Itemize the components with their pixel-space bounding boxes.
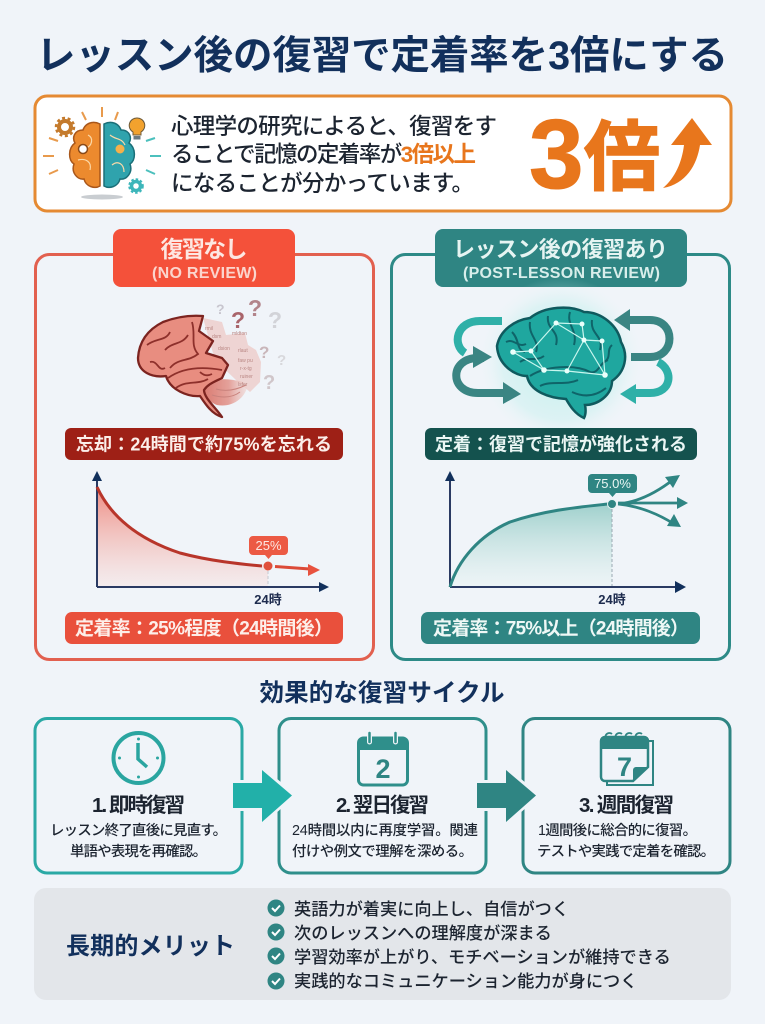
retention result: 75%: 定着率：75%以上（24時間後） [433,618,689,640]
header: no review: (NO REVIEW) [152,265,257,282]
chart: retention curve: 24時 [598,592,626,607]
icon: fading brain with question marks: lsfer [238,382,248,388]
icon: fading brain with question marks [138,295,286,417]
benefit list: 実践的なコミュニケーション能力が身につく [294,971,637,991]
icon: fading brain with question marks: ruiner [240,374,253,380]
arrow: step 2 to 3 [474,766,540,826]
heading: long-term benefits: 長期的メリット [66,933,235,960]
panel: no review [36,229,374,660]
header: no review: 復習なし [160,236,248,262]
panel: long-term benefits [34,888,731,1000]
data label 75.0% [588,474,637,497]
icon: fading brain with question marks: dsm [212,334,221,340]
icon: fading brain with question marks: rmil [205,326,213,332]
panel: intro callout [35,96,731,211]
chart: forgetting curve [92,471,329,607]
icon: fading brain with question marks: rlaut [238,348,248,354]
intro text: になることが分かっています。 [171,171,474,196]
icon: clock [114,733,164,783]
chart: retention curve [445,471,688,607]
retention result: 75% [421,612,700,644]
icon: fading brain with question marks: ? [277,352,286,369]
card: weekly review: 3. 週間復習 [579,794,674,817]
icon: fading brain with question marks: ? [263,372,275,394]
big number 3倍 with arrow [529,99,712,209]
icon: calendar 2 [358,733,408,785]
card: next-day review: 2. 翌日復習 [336,794,429,817]
icon: fading brain with question marks: dsion [218,346,230,352]
icon: brain with gears and light bulb [43,107,161,200]
data label 25%: 25% [255,538,282,553]
icon: fading brain with question marks: ? [259,343,269,362]
intro text: 心理学の研究によると、復習をす [171,114,497,139]
card: weekly review: テストや実践で定着を確認。 [537,843,715,860]
chart: forgetting curve: 24時 [254,592,282,607]
card: next-day review: 24時間以内に再度学習。関連 [292,822,478,839]
benefit list: 学習効率が上がり、モチベーションが維持できる [294,947,671,967]
retention label: 定着：復習で記憶が強化される [435,434,687,454]
card: immediate review: 単語や表現を再確認。 [70,842,207,860]
arrow: step 1 to 2 [230,766,296,826]
benefit list: 英語力が着実に向上し、自信がつく [294,899,569,919]
card: weekly review: 1週間後に総合的に復習。 [538,822,697,839]
icon: fading brain with question marks: faw pu [238,358,253,364]
header: post-lesson review: レッスン後の復習あり [453,237,668,262]
forgetting label: 忘却：24時間で約75%を忘れる [76,434,332,454]
icon: calendar 2: 2 [375,754,391,784]
title: レッスン後の復習で定着率を3倍にする [36,34,728,78]
header: post-lesson review: (POST-LESSON REVIEW) [463,265,660,282]
card: next-day review [279,718,486,873]
panel: post-lesson review [392,229,730,660]
icon: fading brain with question marks: ? [248,295,262,321]
data label 25% [249,536,288,559]
card: immediate review [35,718,242,873]
benefit list [268,899,671,991]
forgetting label [65,428,343,460]
card: weekly review [523,718,730,873]
data label 75.0%: 75.0% [594,476,631,491]
big number 3倍 with arrow: 3 [529,99,584,209]
icon: calendar 7 [601,733,653,785]
icon: calendar 7: 7 [617,752,632,782]
header: post-lesson review [435,229,687,287]
card: immediate review: 1. 即時復習 [92,794,185,817]
intro text: ることで記憶の定着率が3倍以上 [171,142,476,167]
icon: fading brain with question marks: ? [216,301,225,317]
big number 3倍 with arrow: 倍 [584,116,660,201]
retention label [425,428,697,460]
card: immediate review: レッスン終了直後に見直す。 [50,822,227,839]
header: no review [113,229,295,287]
icon: fading brain with question marks: r-x-tg [240,366,252,372]
icon: fading brain with question marks: ? [268,307,282,333]
icon: fading brain with question marks: ? [231,307,245,333]
icon: fading brain with question marks: mldton [232,331,247,337]
retention result: 25%: 定着率：25%程度（24時間後） [75,618,333,640]
intro text [171,114,497,196]
card: next-day review: 付けや例文で理解を深める。 [292,843,473,860]
retention result: 25% [65,612,343,644]
benefit list: 次のレッスンへの理解度が深まる [294,923,552,943]
section heading: review cycle: 効果的な復習サイクル [260,679,504,707]
icon: strengthened brain with loop arrows [456,277,670,445]
